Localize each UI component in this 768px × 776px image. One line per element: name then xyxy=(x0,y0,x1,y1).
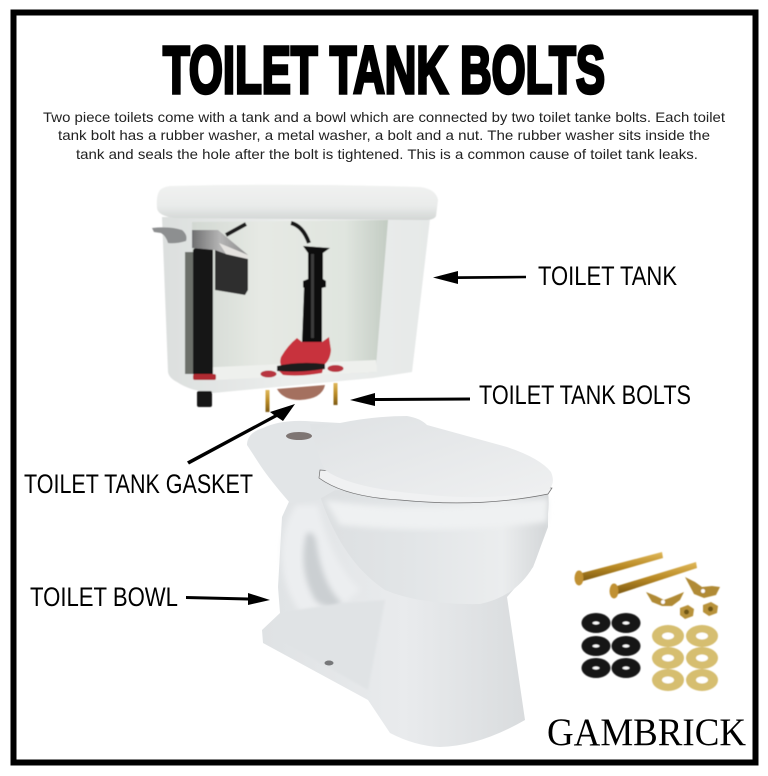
flush handle xyxy=(152,227,186,243)
arrow: toilet bowl xyxy=(186,593,270,605)
tank floor xyxy=(193,360,377,380)
refill valve silver cap xyxy=(192,230,248,259)
float highlight xyxy=(219,243,248,259)
base cutout xyxy=(280,600,385,690)
tank deck xyxy=(247,421,370,503)
toilet bowl illustration xyxy=(247,416,553,747)
label: toilet tank with arrow xyxy=(433,261,677,291)
pedestal and base xyxy=(262,480,548,747)
tank interior cavity xyxy=(192,220,388,380)
gasket xyxy=(277,385,325,400)
intro text block: tank bolt has a rubber washer, a metal washer, a bolt and a nut. The rubber washer sits inside the xyxy=(58,127,710,143)
arrow: gasket xyxy=(187,404,295,464)
trapway shading xyxy=(303,532,342,607)
hex nuts xyxy=(680,602,718,619)
red tank washers xyxy=(260,365,344,378)
refill valve back panel xyxy=(185,252,194,374)
refill valve shaft xyxy=(193,248,213,376)
bowl rim band xyxy=(325,498,548,529)
water supply pipe xyxy=(197,391,212,407)
wing nuts xyxy=(646,577,720,606)
label: toilet tank bolts with arrow xyxy=(350,380,691,410)
trap outer shading xyxy=(282,505,360,612)
arrow: toilet tank xyxy=(433,271,526,284)
fill hose xyxy=(226,224,246,235)
intro text block: tank and seals the hole after the bolt is tightened. This is a common cause of toilet tank leaks. xyxy=(76,146,698,162)
tank lid xyxy=(157,185,438,220)
flush hose xyxy=(291,223,309,243)
label: toilet tank gasket with arrow xyxy=(24,404,295,499)
toilet tank gasket text: TOILET TANK GASKET xyxy=(24,469,253,499)
floor bolt hole xyxy=(324,660,334,666)
arrow: tank bolts xyxy=(350,393,470,406)
refill float cup xyxy=(215,250,248,295)
seat lid xyxy=(310,416,553,497)
toilet tank illustration xyxy=(152,185,438,412)
brass bolts xyxy=(574,552,697,598)
overflow tube xyxy=(302,246,330,342)
seat ring xyxy=(319,470,552,503)
gold metal washers xyxy=(652,625,718,691)
refill valve red base xyxy=(193,374,216,380)
deck opening xyxy=(286,432,312,440)
flapper assembly xyxy=(277,337,331,376)
label: toilet bowl with arrow xyxy=(30,582,270,612)
intro text block: Two piece toilets come with a tank and a bowl which are connected by two toilet tanke bolts. Each toilet xyxy=(43,109,725,125)
toilet tank text: TOILET TANK xyxy=(538,261,677,291)
hardware kit xyxy=(574,552,720,691)
tank bolts xyxy=(266,383,338,412)
black rubber washers xyxy=(582,613,640,678)
bowl body xyxy=(318,490,549,604)
intro text block xyxy=(43,109,725,162)
toilet tank bolts text: TOILET TANK BOLTS xyxy=(479,380,691,410)
washer holes xyxy=(592,622,708,684)
tank body xyxy=(162,217,430,393)
toilet bowl text: TOILET BOWL xyxy=(30,582,178,612)
brand wordmark: GAMBRICK xyxy=(547,711,746,754)
